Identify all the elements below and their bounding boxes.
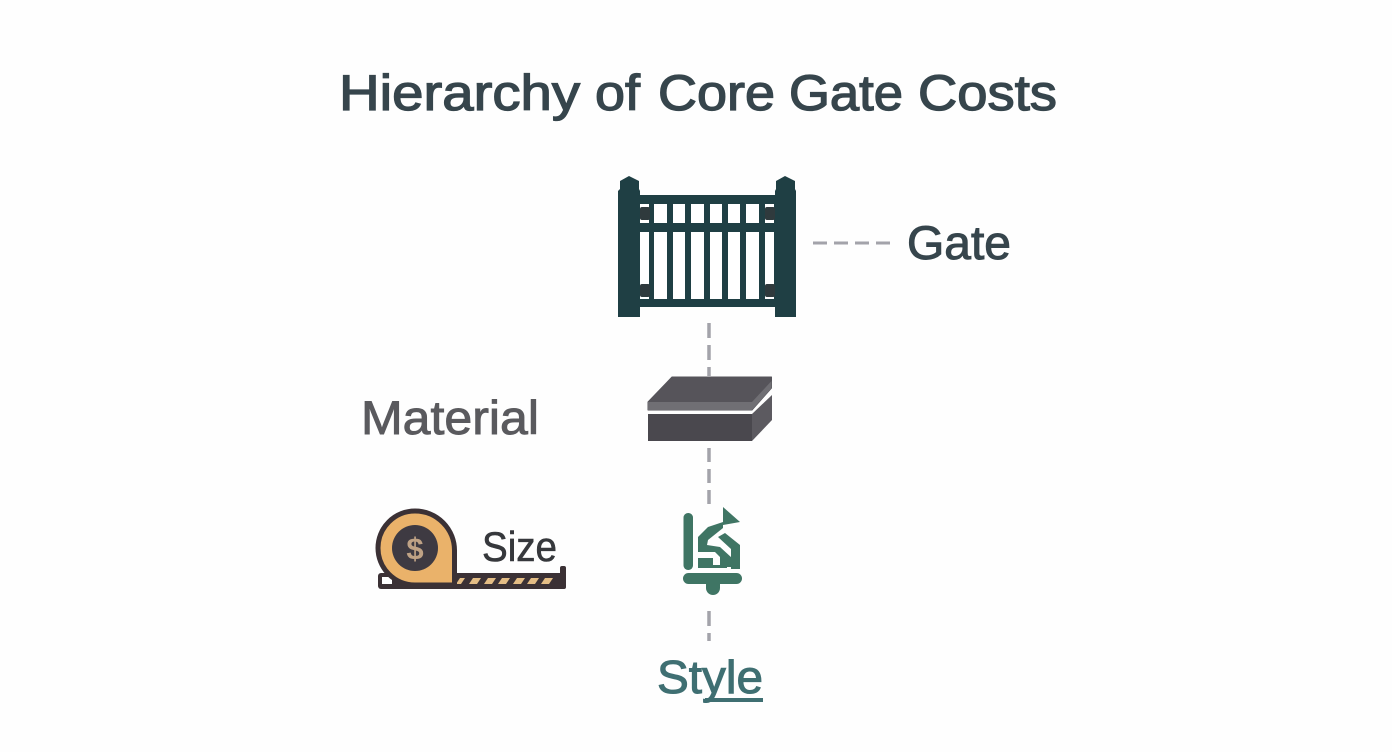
label: size: Size (482, 523, 557, 570)
icon: gate (618, 176, 796, 317)
icon: dollar sign: $ (406, 531, 424, 566)
title: Core (658, 65, 775, 121)
connector: style to label (707, 611, 711, 641)
icon: tape measure (378, 511, 566, 589)
title: of (595, 65, 640, 121)
title: Costs (918, 65, 1057, 121)
icon: style (683, 507, 742, 595)
connector: material to style (707, 448, 711, 505)
title (339, 65, 1057, 121)
title: Gate (789, 65, 903, 121)
icon: material slab (648, 377, 772, 441)
connector: gate to material (707, 323, 711, 376)
label: material: Material (361, 391, 539, 444)
label: style: Style (657, 651, 763, 703)
title: Hierarchy (339, 65, 580, 121)
label: gate: Gate (907, 216, 1011, 269)
connector: gate to label (813, 242, 891, 244)
